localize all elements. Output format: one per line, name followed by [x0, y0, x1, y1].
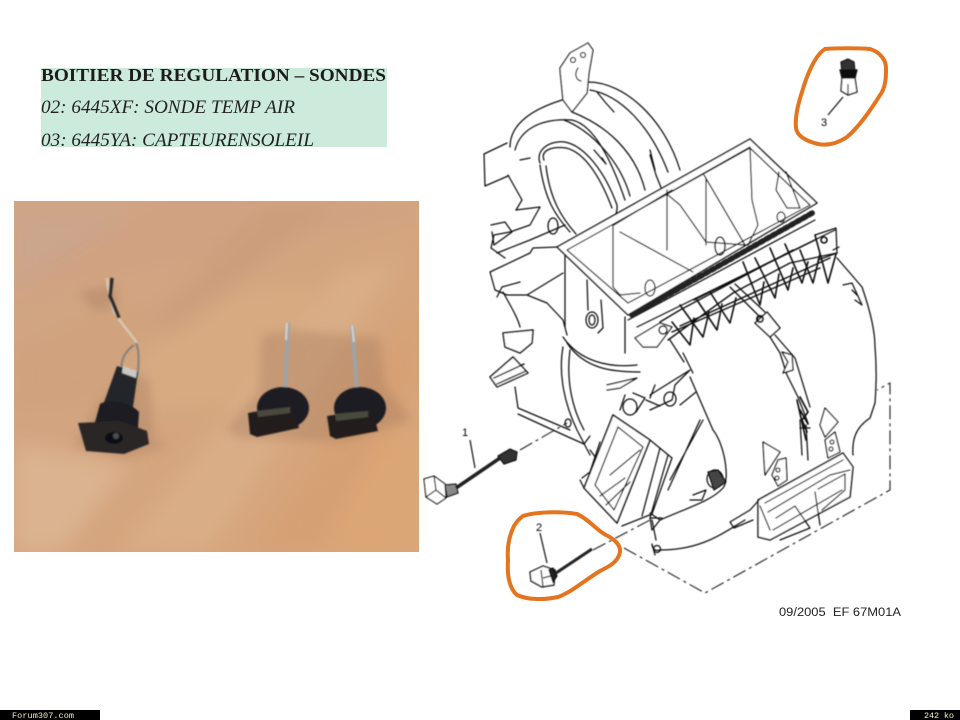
- lower square duct: [584, 415, 650, 523]
- right sensor: [327, 325, 386, 439]
- footer: forum label: [0, 710, 100, 720]
- label: 1: 1: [462, 427, 468, 439]
- label: 2: 2: [536, 522, 542, 534]
- text: part 03: 03: 6445YA: CAPTEURENSOLEIL: [41, 130, 314, 151]
- linkage rod: [730, 284, 765, 317]
- top mounting bracket: [560, 43, 593, 112]
- part 1: wired connector: [424, 427, 517, 504]
- part 2: temperature probe: [530, 522, 592, 587]
- text: part 02: 02: 6445XF: SONDE TEMP AIR: [41, 97, 295, 118]
- photo: three sensors on a wooden surface: [14, 201, 419, 552]
- left body and clips: [490, 247, 567, 335]
- label: 3: 3: [821, 117, 827, 129]
- footer: file size label: [910, 710, 960, 720]
- panel: parts heading table: [41, 65, 387, 151]
- callout: orange ring around part 3: [796, 48, 886, 145]
- comb ridge and fins: [628, 220, 835, 327]
- part 3: sunlight sensor: [821, 59, 857, 129]
- caption: drawing reference: 09/2005 EF 67M01A: [779, 607, 901, 619]
- dashed assembly lines: [520, 383, 890, 593]
- left sensor with wires: [78, 278, 149, 454]
- lower right duct: [758, 453, 853, 540]
- duct flaps: [763, 408, 838, 475]
- diagram: exploded view of heater housing: [484, 43, 876, 555]
- heading: BOITIER DE REGULATION: BOITIER DE REGULATION – SONDES: [41, 65, 386, 85]
- middle sensor: [248, 323, 309, 437]
- callout: orange ring around part 2: [508, 512, 620, 599]
- upper air box: [557, 139, 817, 315]
- upper blower casing: [564, 82, 680, 196]
- right body shell: [837, 258, 876, 455]
